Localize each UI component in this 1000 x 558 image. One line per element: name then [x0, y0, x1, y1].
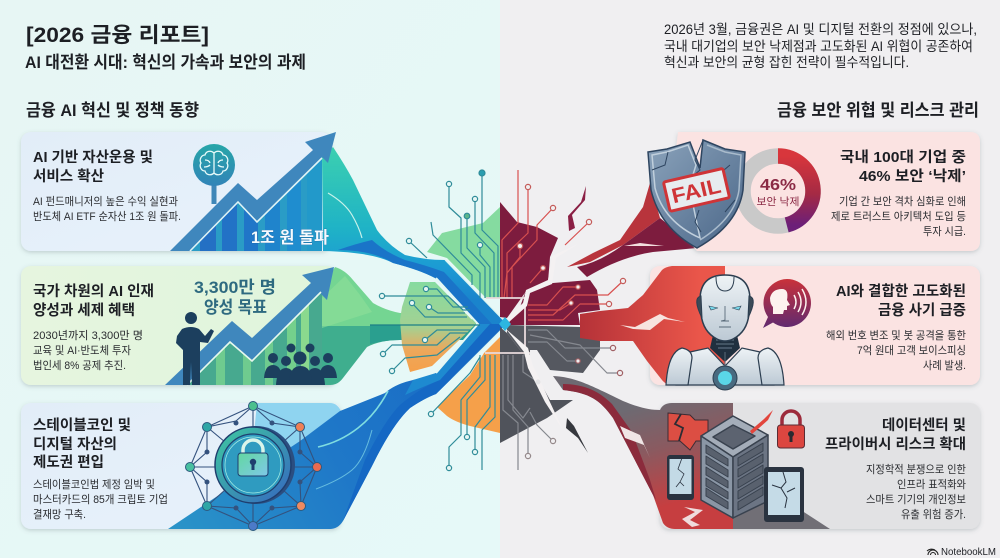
heading: left section: 금융 AI 혁신 및 정책 동향 [26, 101, 199, 120]
panel: card national AI talent [21, 266, 476, 385]
callout: 3,300만 명 양성 목표: 양성 목표 [204, 298, 267, 317]
text block: right card 3: 데이터센터 및 [882, 417, 966, 434]
callout: 3,300만 명 양성 목표 [194, 278, 276, 317]
text block: card 2: 양성과 세제 혜택 [33, 302, 135, 319]
stamp: FAIL: FAIL [669, 175, 723, 208]
subtitle: AI 대전환 시대: 혁신의 가속과 보안의 과제 [25, 53, 306, 72]
flow: green stream to chevron [320, 267, 476, 328]
text block: right card 2: 사례 발생. [923, 359, 966, 372]
flow: red stream to robot [580, 266, 725, 385]
text block: right card 2: AI와 결합한 고도화된 [836, 283, 966, 300]
logo: NotebookLM: NotebookLM [941, 546, 996, 558]
text block: card 2: 법인세 8% 공제 추진. [33, 359, 126, 372]
central circuit: right blobs [500, 202, 600, 443]
icon: server tower [701, 410, 773, 518]
icon: voice bubble [763, 279, 811, 328]
text block: right card 2: 해외 번호 변조 및 봇 공격을 통한 [826, 328, 966, 342]
circuit traces: right red and grey [502, 170, 640, 470]
bar chart stripes [190, 150, 325, 251]
flow: red stream to shield [567, 183, 697, 277]
icon: cracked shield [648, 140, 745, 248]
text block: right card 3: 지정학적 분쟁으로 인한 [866, 463, 966, 476]
text block: card 2: 교육 및 AI·반도체 투자 [33, 344, 131, 357]
text block: right card 1: 투자 시급. [923, 225, 966, 238]
icon: broken phone [667, 455, 694, 500]
flow: grey-red stream to servers [553, 376, 733, 529]
arrow: talent growth [165, 267, 334, 385]
icon: brain pin [193, 144, 235, 204]
text block: card 2: 국가 차원의 AI 인재 [33, 283, 154, 300]
chevron tip [499, 317, 511, 331]
text block: card 1: AI 기반 자산운용 및 [33, 149, 153, 166]
intro text: 2026년 3월, 금융권은 AI 및 디지털 전환의 정점에 있으나, [664, 22, 977, 37]
chart: donut 46%: 보안 낙제 [756, 196, 800, 208]
icon: crowd [264, 344, 337, 385]
intro text: 국내 대기업의 보안 낙제점과 고도화된 AI 위협이 공존하여 [664, 39, 973, 54]
text block: card 3: 디지털 자산의 [33, 436, 117, 453]
chart: donut 46%: 46% [760, 177, 796, 194]
text block: card 2 [33, 283, 154, 372]
intro text [664, 22, 977, 70]
title: [2026 금융 리포트] [26, 24, 209, 47]
text block: right card 1: 제로 트러스트 아키텍처 도입 등 [831, 210, 966, 223]
text block: right card 3: 인프라 표적화와 [897, 478, 966, 491]
text block: right card 2 [826, 283, 966, 372]
text block: right card 3: 유출 위험 증가. [901, 508, 966, 521]
text block: card 1 [33, 149, 181, 223]
icon: broken tablet [764, 467, 804, 522]
text block: card 3: 스테이블코인법 제정 임박 및 [33, 478, 155, 491]
text block: card 1: AI 펀드매니저의 높은 수익 실현과 [33, 195, 178, 208]
icon: crypto network coin [186, 402, 322, 530]
icon: humanoid robot [666, 275, 784, 390]
panel: card AI fraud [580, 266, 980, 390]
text block: right card 1 [831, 149, 966, 238]
cracks and circuit frame [485, 186, 588, 453]
lightning shards [568, 186, 586, 231]
chart stripes [190, 294, 322, 385]
text block: right card 1: 46% 보안 ‘낙제’ [859, 168, 966, 185]
panel: right background [500, 0, 1000, 558]
text block: card 2: 2030년까지 3,300만 명 [33, 329, 143, 342]
text block: right card 1: 기업 간 보안 격차 심화로 인해 [839, 194, 966, 208]
callout: 1조 원 돌파: 1조 원 돌파 [251, 228, 329, 247]
text block: card 3: 마스터카드의 85개 크립토 기업 [33, 493, 168, 506]
arrow: rising trend [170, 132, 336, 251]
text block: card 1: 반도체 AI ETF 순자산 1조 원 돌파. [33, 210, 181, 223]
icon: presenter [176, 312, 214, 385]
text block: card 3: 스테이블코인 및 [33, 417, 131, 434]
panel: card AI asset management [21, 132, 507, 324]
text block: right card 3: 프라이버시 리스크 확대 [825, 436, 966, 453]
text block: right card 3 [825, 417, 966, 521]
text block: card 3 [33, 417, 168, 521]
chart: donut 46% [743, 156, 813, 226]
text block: card 3: 제도권 편입 [33, 454, 104, 471]
text block: right card 1: 국내 100대 기업 중 [840, 149, 966, 166]
text block: right card 2: 7억 원대 고객 보이스피싱 [857, 344, 966, 357]
panel: card data center [553, 376, 980, 529]
callout: 3,300만 명 양성 목표: 3,300만 명 [194, 278, 276, 297]
panel: left background [0, 0, 500, 558]
intro text: 혁신과 보안의 균형 잡힌 전략이 필수적입니다. [664, 55, 909, 70]
text block: card 3: 결재망 구축. [33, 508, 86, 521]
central circuit: left blobs [400, 207, 507, 433]
icon: broken folder [668, 413, 708, 450]
flow: teal stream to chevron [322, 147, 507, 324]
heading: right section: 금융 보안 위협 및 리스크 관리 [777, 101, 979, 120]
text block: card 1: 서비스 확산 [33, 168, 104, 185]
panel: card security fail [648, 132, 980, 251]
panel: card stablecoin [21, 324, 507, 530]
text block: right card 3: 스마트 기기의 개인정보 [866, 493, 966, 506]
icon: red padlock [778, 411, 804, 448]
flow: blue stream to chevron [168, 324, 507, 529]
text block: right card 2: 금융 사기 급증 [878, 302, 966, 319]
circuit traces: left teal [370, 170, 498, 471]
